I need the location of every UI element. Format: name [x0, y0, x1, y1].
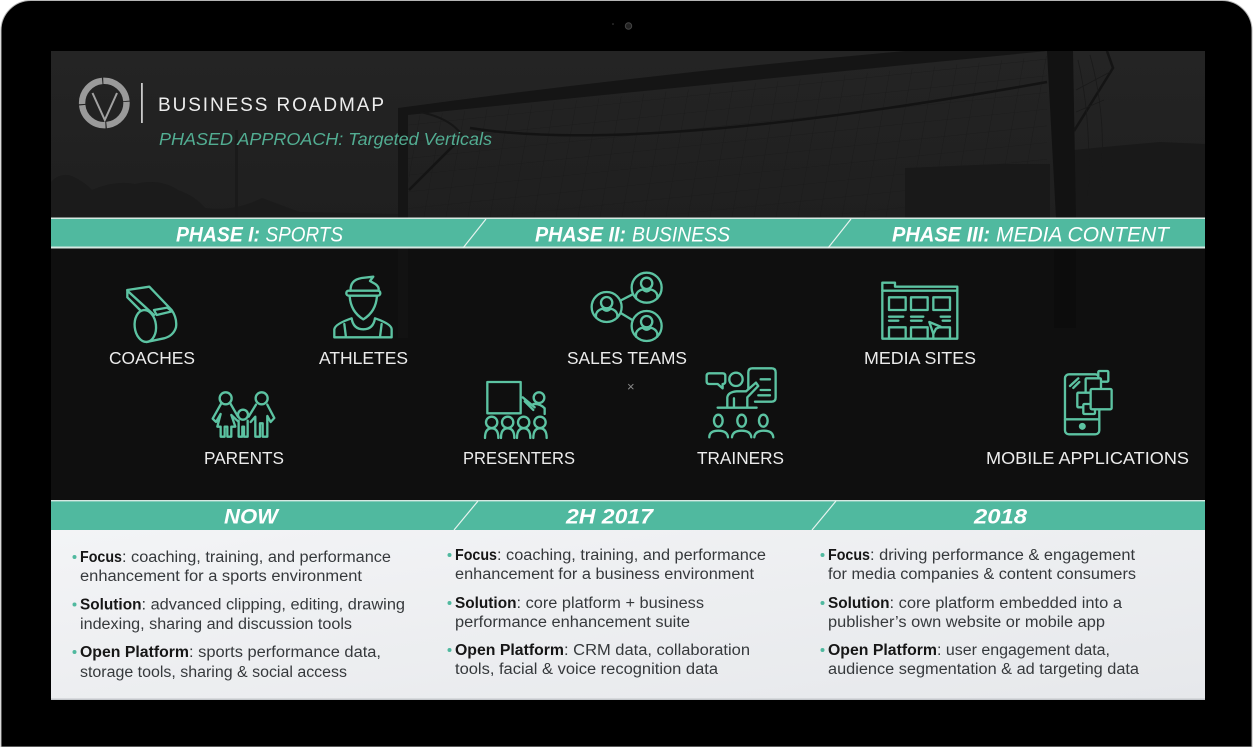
timeline banner: [51, 500, 1205, 530]
column: now: indexing, sharing and discussion tools: [80, 616, 352, 633]
phase 2 heading: BUSINESS: [632, 224, 730, 246]
column: 2018: Focus: [828, 547, 870, 564]
panel: details: [51, 530, 1205, 700]
label: coaches: COACHES: [109, 348, 195, 368]
label: mobile applications: MOBILE APPLICATIONS: [986, 448, 1189, 468]
phase 3 heading: [892, 224, 1171, 246]
column: 2H 2017: : core platform + business: [516, 595, 704, 612]
column: 2018: audience segmentation & ad targeting data: [828, 661, 1139, 678]
column: now: : sports performance data,: [189, 644, 381, 661]
header: [81, 80, 492, 149]
column: 2H 2017: enhancement for a business environment: [455, 566, 755, 583]
column: 2018: : core platform embedded into a: [890, 595, 1122, 612]
subtitle: PHASED APPROACH: Targeted Verticals: [159, 129, 492, 149]
timeline: 2018: 2018: [973, 506, 1027, 528]
icon: media site: [882, 283, 957, 339]
column: 2018: publisher’s own website or mobile app: [828, 614, 1105, 631]
column: now: Solution: [80, 596, 142, 614]
column: 2018: : user engagement data,: [937, 642, 1110, 659]
phase 3 heading: MEDIA CONTENT: [996, 224, 1171, 246]
column: now: enhancement for a sports environment: [80, 568, 363, 585]
label: trainers: TRAINERS: [697, 448, 784, 468]
column: now: [72, 549, 405, 681]
icon: trainer: [707, 368, 776, 437]
icon: athlete: [334, 277, 392, 337]
phase 1 heading: [176, 224, 343, 246]
label: presenters: PRESENTERS: [463, 448, 575, 468]
label: parents: PARENTS: [204, 448, 284, 468]
logo: [81, 80, 128, 126]
phase 2 heading: PHASE II:: [535, 224, 626, 246]
phase 1 heading: PHASE I:: [176, 224, 260, 246]
timeline: 2H 2017: 2H 2017: [565, 506, 654, 528]
column: 2H 2017: Focus: [455, 547, 497, 564]
title: BUSINESS ROADMAP: [158, 95, 384, 116]
column: now: : advanced clipping, editing, drawing: [142, 596, 405, 614]
column: now: Focus: [80, 549, 122, 566]
phase banner: [51, 218, 1205, 248]
column: 2018: Solution: [828, 595, 890, 612]
column: 2018: Open Platform: [828, 642, 937, 659]
camera: [612, 23, 632, 29]
column: 2018: for media companies & content consumers: [828, 566, 1136, 583]
column: 2H 2017: Solution: [455, 595, 516, 612]
column: 2018: : driving performance & engagement: [870, 547, 1136, 564]
column: 2H 2017: tools, facial & voice recognition data: [455, 661, 718, 678]
close mark: ×: [627, 379, 635, 394]
timeline: now: NOW: [224, 506, 280, 528]
column: now: Open Platform: [80, 644, 189, 661]
column: 2H 2017: Open Platform: [455, 642, 564, 659]
column: now: storage tools, sharing & social access: [80, 664, 347, 681]
column: 2H 2017: : CRM data, collaboration: [564, 642, 750, 659]
icon: family: [213, 392, 274, 437]
column: 2018: [820, 547, 1139, 678]
icon: whistle: [127, 287, 176, 343]
phase 3 heading: PHASE III:: [892, 224, 990, 246]
column: 2H 2017: performance enhancement suite: [455, 614, 690, 631]
phase 1 heading: SPORTS: [266, 224, 343, 246]
label: sales teams: SALES TEAMS: [567, 348, 687, 368]
label: athletes: ATHLETES: [319, 348, 408, 368]
label: media sites: MEDIA SITES: [864, 348, 976, 368]
column: 2H 2017: : coaching, training, and performance: [497, 547, 766, 564]
column: 2H 2017: [448, 547, 766, 678]
icon: presenter: [485, 382, 547, 438]
screen background photo: goal net: [51, 51, 1205, 501]
icon: sales team network: [592, 273, 662, 341]
phase 2 heading: [535, 224, 730, 246]
icon: mobile apps: [1065, 371, 1112, 434]
column: now: : coaching, training, and performance: [122, 549, 391, 566]
